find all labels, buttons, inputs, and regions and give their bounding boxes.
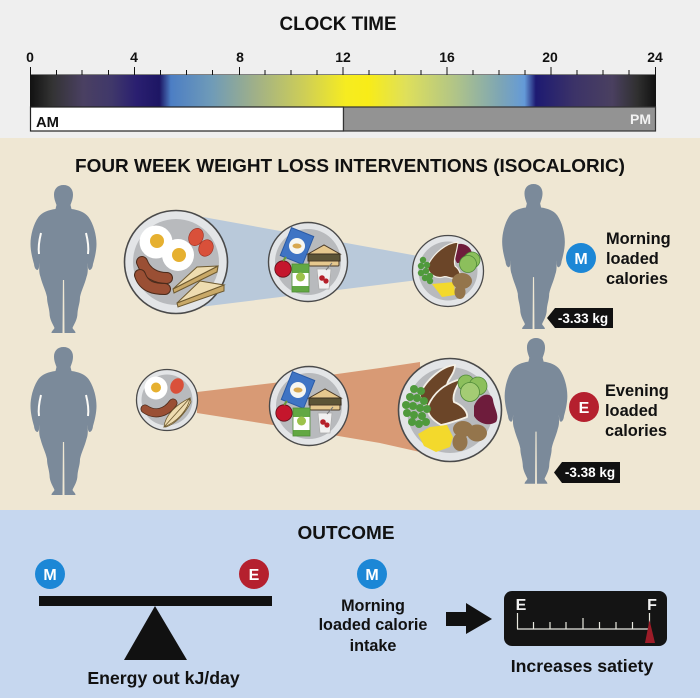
- badge: morning: M: [365, 567, 379, 584]
- plate: small dinner: [412, 236, 484, 306]
- hour labels: 0: [26, 49, 34, 65]
- caption: increases satiety: Increases satiety: [511, 656, 653, 676]
- heading: outcome: OUTCOME: [298, 523, 394, 543]
- potatoes: [452, 421, 487, 451]
- meat: [420, 365, 467, 425]
- panel: outcome: [0, 510, 700, 698]
- heading: clock time: CLOCK TIME: [280, 14, 396, 35]
- hour labels: 8: [236, 49, 244, 65]
- breakfast food: [140, 226, 224, 307]
- morning calorie wedge: [200, 217, 418, 307]
- evening loaded calories label: loaded: [605, 402, 658, 420]
- arm gaps: morning before: [39, 233, 88, 254]
- hour labels: [26, 49, 663, 65]
- evening loaded calories label: Evening: [605, 382, 669, 400]
- toast: [173, 266, 224, 307]
- hour labels: 24: [647, 49, 663, 65]
- evening loaded calories label: [569, 382, 669, 440]
- tag: -3.33 kg: -3.33 kg: [558, 311, 608, 326]
- panel: interventions: [0, 138, 700, 510]
- balance scale: E: [249, 567, 260, 584]
- fuel gauge: E: [516, 597, 527, 614]
- cucumber: [460, 252, 480, 272]
- morning loaded calories label: [566, 230, 671, 288]
- daylight gradient bar: [30, 75, 656, 107]
- potatoes: [452, 273, 472, 299]
- person: morning before: [30, 185, 96, 333]
- arrow: [446, 603, 492, 634]
- balance scale: [35, 559, 272, 660]
- morning loaded calorie intake text: loaded calorie: [319, 616, 427, 634]
- corn: [432, 282, 455, 297]
- tag: -3.38 kg: [554, 462, 620, 483]
- evening loaded calories label: calories: [605, 422, 667, 440]
- cucumber: [458, 375, 487, 402]
- fuel gauge: [504, 591, 667, 646]
- morning loaded calories label: loaded: [606, 250, 659, 268]
- morning loaded calorie intake text: [319, 597, 427, 655]
- plate: large dinner: [398, 358, 502, 462]
- panel: clock time: [0, 0, 700, 138]
- badge: morning: [357, 559, 387, 589]
- sausages: [140, 262, 167, 289]
- evening loaded calories label: E: [579, 400, 590, 417]
- hour labels: 4: [130, 49, 138, 65]
- tag: -3.33 kg: [547, 308, 613, 328]
- heading: interventions: FOUR WEEK WEIGHT LOSS INTERVENTIONS (ISOCALORIC): [75, 156, 625, 176]
- eggs: [140, 226, 194, 271]
- plate: evening snack: [270, 366, 348, 446]
- plate: morning snack: [268, 222, 348, 302]
- morning loaded calories label: M: [574, 251, 588, 268]
- corn: [418, 425, 453, 452]
- tomatoes: [186, 226, 216, 259]
- fuel gauge: F: [647, 597, 657, 614]
- radicchio: [474, 395, 497, 424]
- plate: small breakfast: [136, 370, 198, 430]
- balance scale: M: [43, 567, 57, 584]
- morning loaded calories label: calories: [606, 270, 668, 288]
- egg: [144, 376, 168, 400]
- AM segment: AM: [36, 114, 59, 131]
- morning loaded calories label: Morning: [606, 230, 671, 248]
- arm gaps: evening before: [39, 395, 88, 416]
- peas: [402, 385, 431, 428]
- person: morning after: [502, 184, 565, 329]
- hour labels: 12: [335, 49, 351, 65]
- person: evening before: [30, 347, 96, 495]
- hour labels: 16: [439, 49, 455, 65]
- morning loaded calorie intake text: Morning: [341, 597, 405, 615]
- evening calorie wedge: [197, 362, 420, 452]
- tag: -3.38 kg: -3.38 kg: [565, 465, 615, 480]
- PM segment: PM: [630, 111, 651, 127]
- PM segment: [344, 107, 656, 131]
- caption: energy out: Energy out kJ/day: [87, 668, 240, 688]
- toast: [164, 398, 191, 427]
- person: evening after: [505, 338, 567, 484]
- tomato: [168, 376, 186, 396]
- plate: large breakfast: [124, 210, 228, 314]
- AM segment: [30, 107, 344, 131]
- peas: [418, 257, 433, 284]
- meat: [428, 242, 460, 278]
- sausage: [145, 403, 173, 413]
- morning loaded calorie intake text: intake: [350, 637, 396, 655]
- radicchio: [454, 244, 472, 263]
- hour labels: 20: [542, 49, 558, 65]
